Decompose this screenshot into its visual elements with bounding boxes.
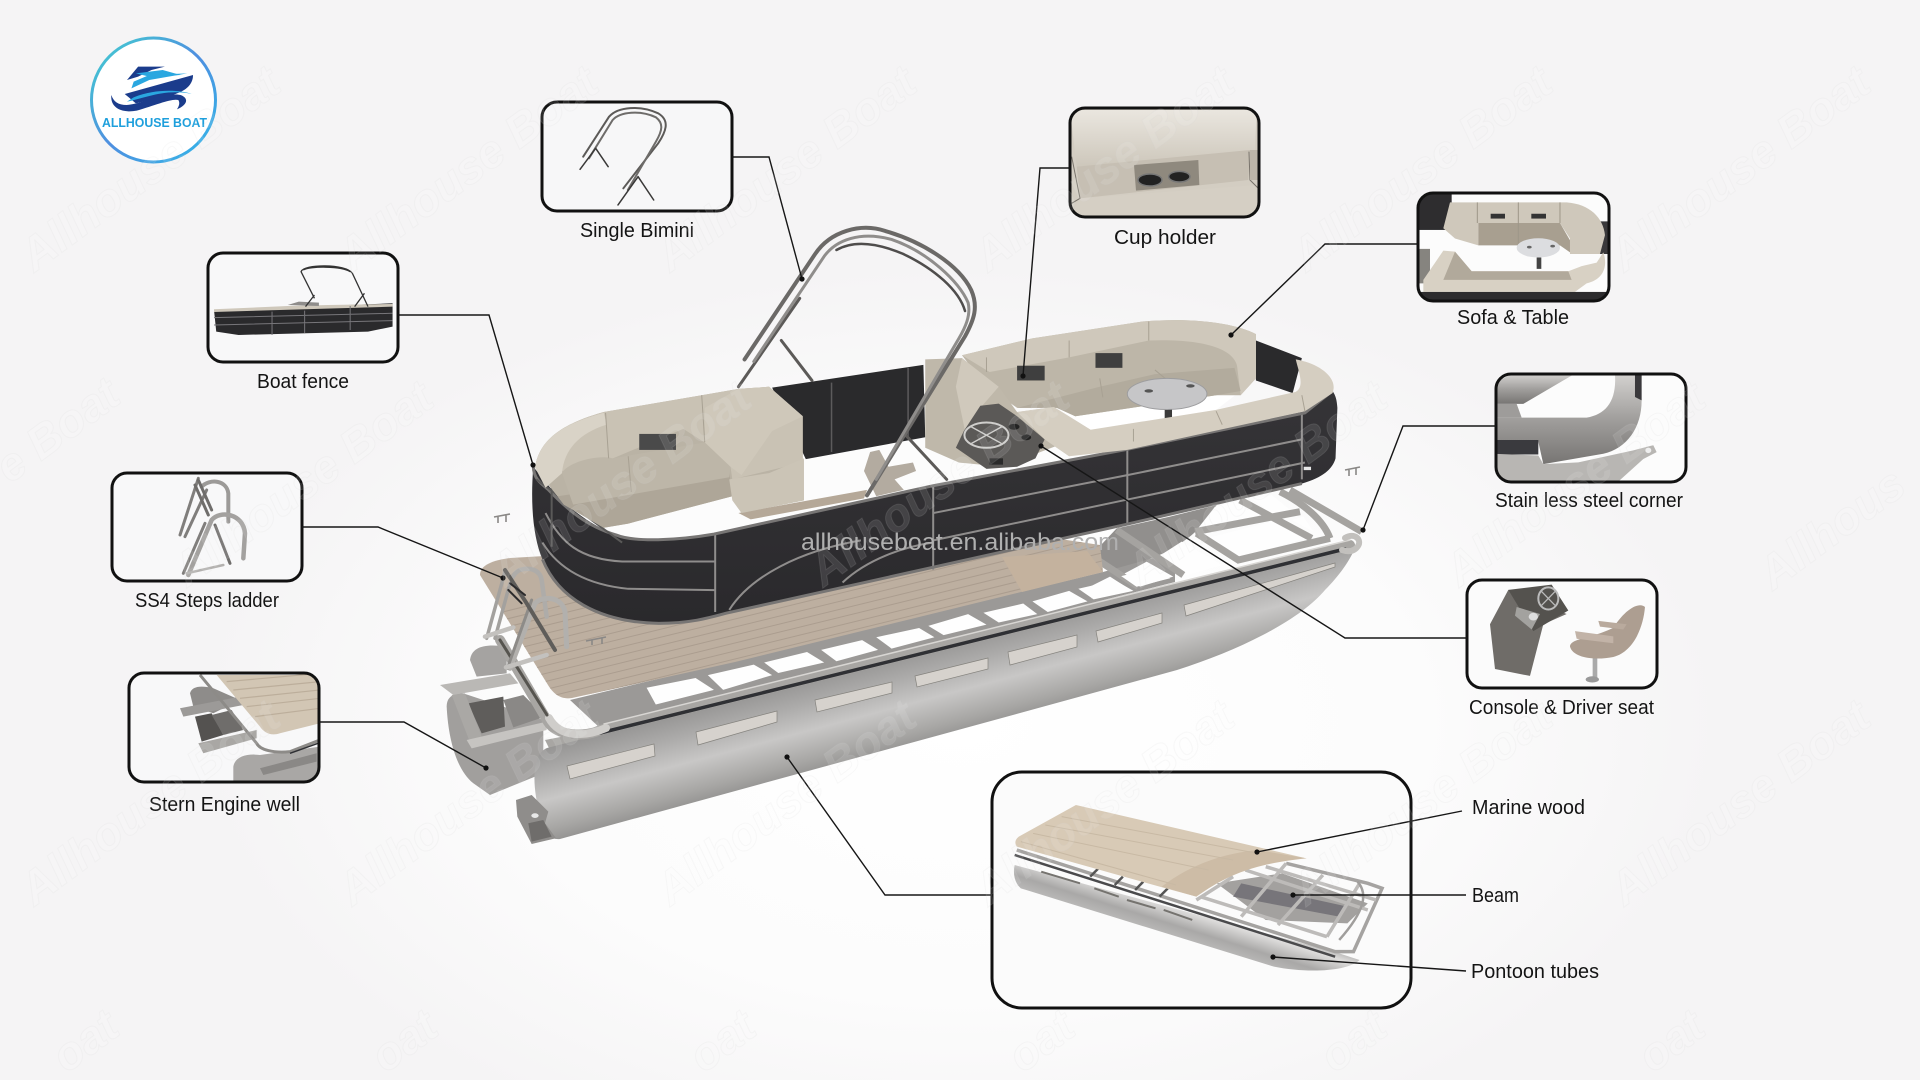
driver seat <box>864 450 916 496</box>
watermark pattern: Allhouse Boat <box>1281 688 1563 915</box>
fence hull walls <box>532 391 1337 623</box>
deck frame band <box>570 552 1175 728</box>
watermark pattern: Allhouse Boat <box>1281 54 1563 281</box>
panel: stainless steel corner <box>1495 374 1686 512</box>
watermark pattern: oat <box>42 998 129 1080</box>
watermark pattern: Allhouse Boat <box>1434 369 1716 596</box>
watermark pattern: oat <box>1310 998 1397 1080</box>
stern engine well <box>440 673 600 795</box>
deck cleats <box>494 467 1360 645</box>
watermark pattern: Allhous <box>1747 457 1915 600</box>
label: pontoon tubes: Pontoon tubes <box>1471 961 1599 983</box>
panel: sofa and table <box>1418 193 1610 329</box>
tube flanges <box>567 563 1335 779</box>
marine wood deck <box>480 540 1103 698</box>
right sofa and table <box>962 320 1334 456</box>
watermark pattern: Allhouse Boat <box>327 54 609 281</box>
watermark pattern: Allhouse Boat <box>480 369 762 596</box>
label: Single Bimini <box>580 220 694 242</box>
watermark pattern: oat <box>1628 998 1715 1080</box>
marine wood sheet <box>1015 805 1307 897</box>
tube stern bracket <box>516 795 556 844</box>
bimini top frame <box>738 228 975 495</box>
icon: boat side view <box>214 266 393 335</box>
panel: cup holder <box>1070 108 1260 249</box>
watermark pattern: Allhouse Boat <box>162 369 444 596</box>
near pontoon tube <box>534 548 1355 839</box>
icon: cup holder close-up <box>1072 110 1258 204</box>
icon: console <box>1490 585 1645 682</box>
label: SS4 Steps ladder <box>135 590 279 612</box>
label: Sofa & Table <box>1457 307 1569 329</box>
logo wordmark: ALLHOUSE BOAT <box>102 115 207 130</box>
chart: exploded pontoon structure <box>1014 805 1382 971</box>
label: Console & Driver seat <box>1469 697 1654 719</box>
watermark pattern: Allhouse Boat <box>9 54 291 281</box>
label: beam: Beam <box>1472 885 1519 907</box>
label: Stern Engine well <box>149 794 300 816</box>
icon: corner close-up <box>1495 375 1657 483</box>
website watermark text: allhouseboat.en.alibaba.com <box>801 529 1119 556</box>
pontoon tube <box>1014 865 1368 971</box>
watermark pattern: Allhouse Boat <box>963 54 1245 281</box>
front frame beams <box>1090 490 1362 598</box>
panel: SS4 steps ladder <box>112 473 302 612</box>
watermark pattern: Allhouse Boat <box>645 54 927 281</box>
panel: boat fence <box>208 253 398 393</box>
watermark pattern: Allhouse Boat <box>645 688 927 915</box>
console <box>925 358 1091 469</box>
watermark pattern: Allhouse Boat <box>798 369 1080 596</box>
icon: driver seat <box>1570 605 1645 682</box>
panel: single bimini <box>542 102 732 242</box>
panel: console and driver seat <box>1467 580 1657 719</box>
icon: sofa and table close-up <box>1418 194 1610 302</box>
watermark pattern: Allhouse Boat <box>1599 688 1881 915</box>
side rail <box>500 536 1359 735</box>
icon: bimini frame <box>580 108 666 205</box>
white slots between beams <box>647 568 1170 705</box>
watermark pattern: oat <box>679 998 766 1080</box>
panel: stern engine well <box>129 673 320 816</box>
label: Cup holder <box>1114 227 1216 249</box>
leader lines <box>302 157 1496 971</box>
far wall and floor <box>738 365 925 519</box>
watermark pattern: oat <box>998 998 1085 1080</box>
label: Boat fence <box>257 371 349 393</box>
icon: ladder <box>180 478 245 575</box>
left sofa <box>535 387 804 528</box>
label: marine wood: Marine wood <box>1472 797 1585 819</box>
watermark pattern: oat <box>361 998 448 1080</box>
watermark pattern: Allhouse Boat <box>963 688 1245 915</box>
main pontoon boat illustration <box>440 228 1362 844</box>
label: Stain less steel corner <box>1495 490 1683 512</box>
far pontoon tube <box>470 505 1217 677</box>
ladder on stern <box>485 569 567 668</box>
panel: deck structure exploded view <box>992 772 1599 1008</box>
watermark pattern: Allhouse Boat <box>1599 54 1881 281</box>
watermark pattern: Allhouse Boat <box>1116 369 1398 596</box>
icon: stern close-up <box>180 673 320 782</box>
watermark pattern: Allhouse Boat <box>9 688 291 915</box>
logo ship mark <box>111 67 193 111</box>
watermark pattern: Allhouse Boat <box>327 688 609 915</box>
beam grid <box>1015 850 1382 957</box>
logo <box>92 38 216 162</box>
